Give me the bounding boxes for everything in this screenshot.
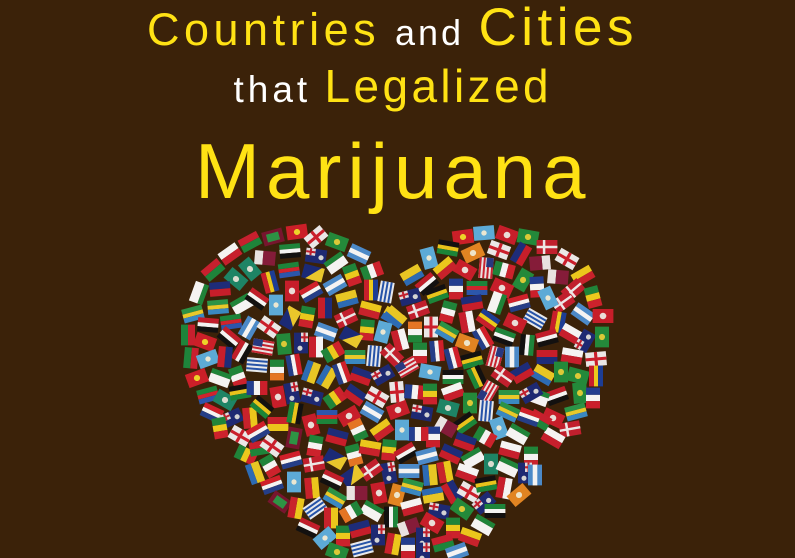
heading line 3: Marijuana [195,127,592,215]
heart made of national flags [181,224,613,558]
title [147,0,638,215]
heading line 1: Countries [147,4,380,55]
heading line 1 [147,0,638,57]
heading line 2: that [234,69,311,110]
heading line 1: and [395,12,464,53]
heading line 2: Legalized [324,60,552,112]
